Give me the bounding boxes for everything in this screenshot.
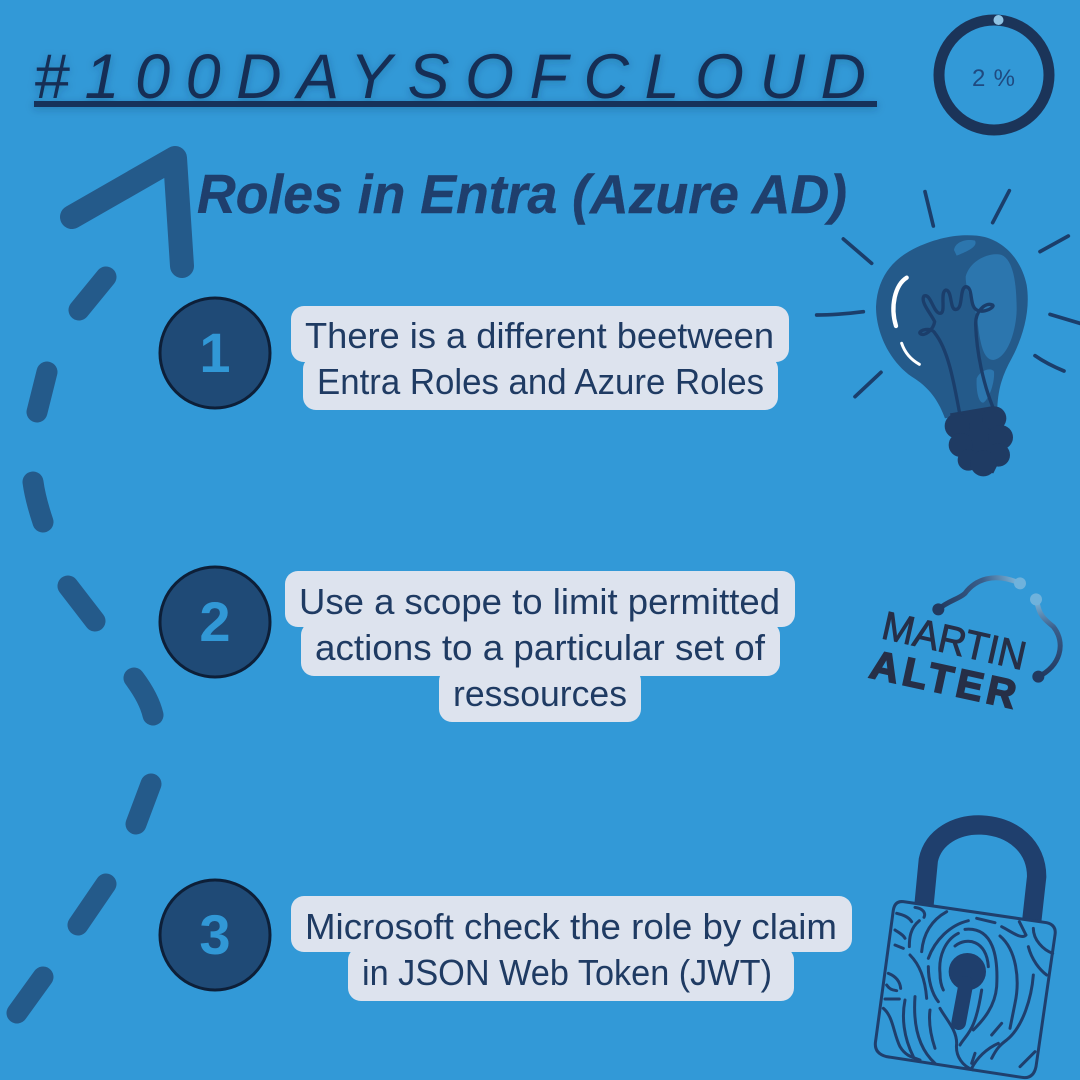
step 3 text: [291, 896, 852, 1001]
icon: light bulb: [817, 191, 1080, 476]
icon: fingerprint padlock: [875, 825, 1055, 1078]
step 1 text: [291, 306, 789, 410]
dashed arrow: [17, 158, 182, 1013]
subtitle: Roles in Entra (Azure AD): [197, 163, 847, 225]
logo: Martin Alter: [866, 577, 1060, 717]
step 1 marker: [160, 298, 270, 408]
step 2 text: Use a scope to limit permitted: [299, 581, 780, 622]
step 3 marker: 3: [199, 903, 231, 966]
step 1 text: Entra Roles and Azure Roles: [317, 361, 764, 402]
logo: Martin Alter: MARTIN: [878, 604, 1030, 679]
step 2 text: actions to a particular set of: [315, 627, 766, 668]
logo: Martin Alter: ALTER: [866, 643, 1020, 717]
title: #100DAYSOFCLOUD: [34, 42, 866, 112]
step 3 text: Microsoft check the role by claim: [305, 906, 837, 947]
step 3 text: in JSON Web Token (JWT): [362, 952, 772, 993]
step 1 text: There is a different beetween: [305, 315, 774, 356]
step 3 marker: [160, 880, 270, 990]
step 2 marker: 2: [199, 590, 231, 653]
step 2 text: ressources: [453, 673, 627, 714]
step 2 text: [285, 571, 795, 722]
step 2 marker: [160, 567, 270, 677]
progress ring: 2 %: 2 %: [972, 65, 1015, 92]
progress ring: 2 %: [939, 15, 1049, 130]
step 1 marker: 1: [199, 321, 231, 384]
